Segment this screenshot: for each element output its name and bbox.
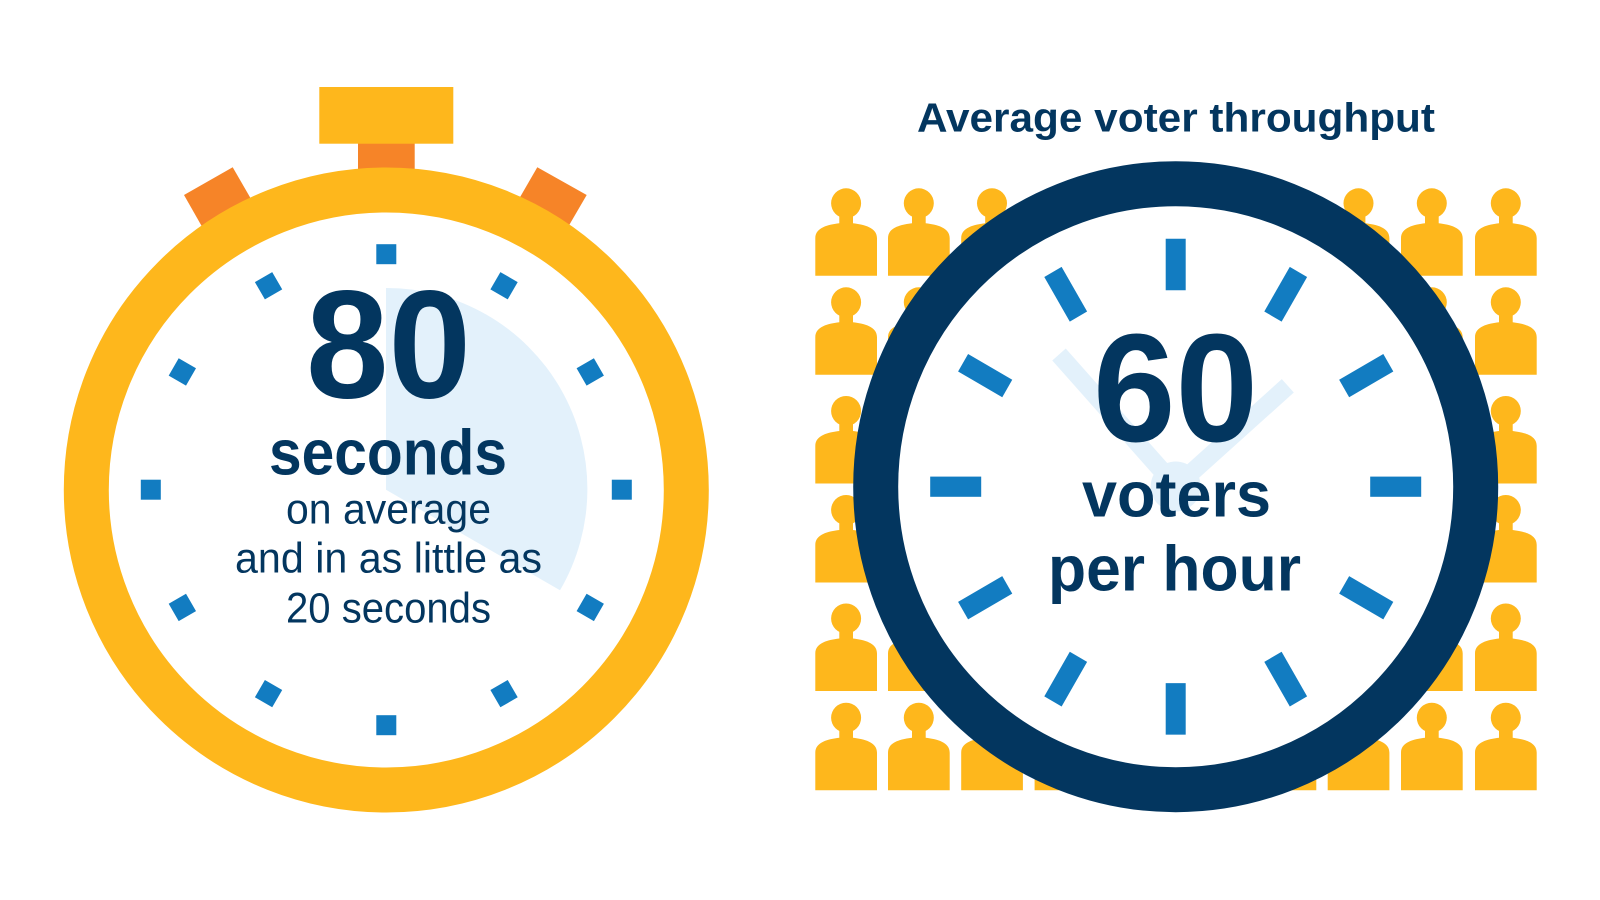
big number 60: 60 [1093, 302, 1258, 474]
stopwatch side button left [184, 167, 262, 246]
clock tick marks [930, 239, 1421, 735]
big number 80: 80 [306, 258, 471, 430]
label: voters: voters [1082, 458, 1271, 530]
stopwatch stem [358, 143, 415, 173]
label: seconds: seconds [269, 416, 507, 488]
label: per hour: per hour [1048, 532, 1301, 604]
label: on average: on average [286, 485, 491, 533]
stopwatch side button right [508, 167, 587, 246]
panel: clock [876, 184, 1476, 790]
clock hands [1059, 354, 1288, 512]
panel: crowd of voters [815, 188, 1537, 790]
label: and in as little as: and in as little as [235, 535, 542, 583]
panel: stopwatch [86, 87, 686, 790]
label: 20 seconds: 20 seconds [286, 584, 491, 632]
stopwatch crown [319, 87, 453, 144]
stopwatch ring [86, 190, 686, 790]
clock ring [876, 184, 1476, 790]
elapsed time wedge [386, 288, 587, 590]
stopwatch tick marks [141, 244, 632, 735]
heading: average voter throughput: Average voter throughput [917, 95, 1435, 141]
